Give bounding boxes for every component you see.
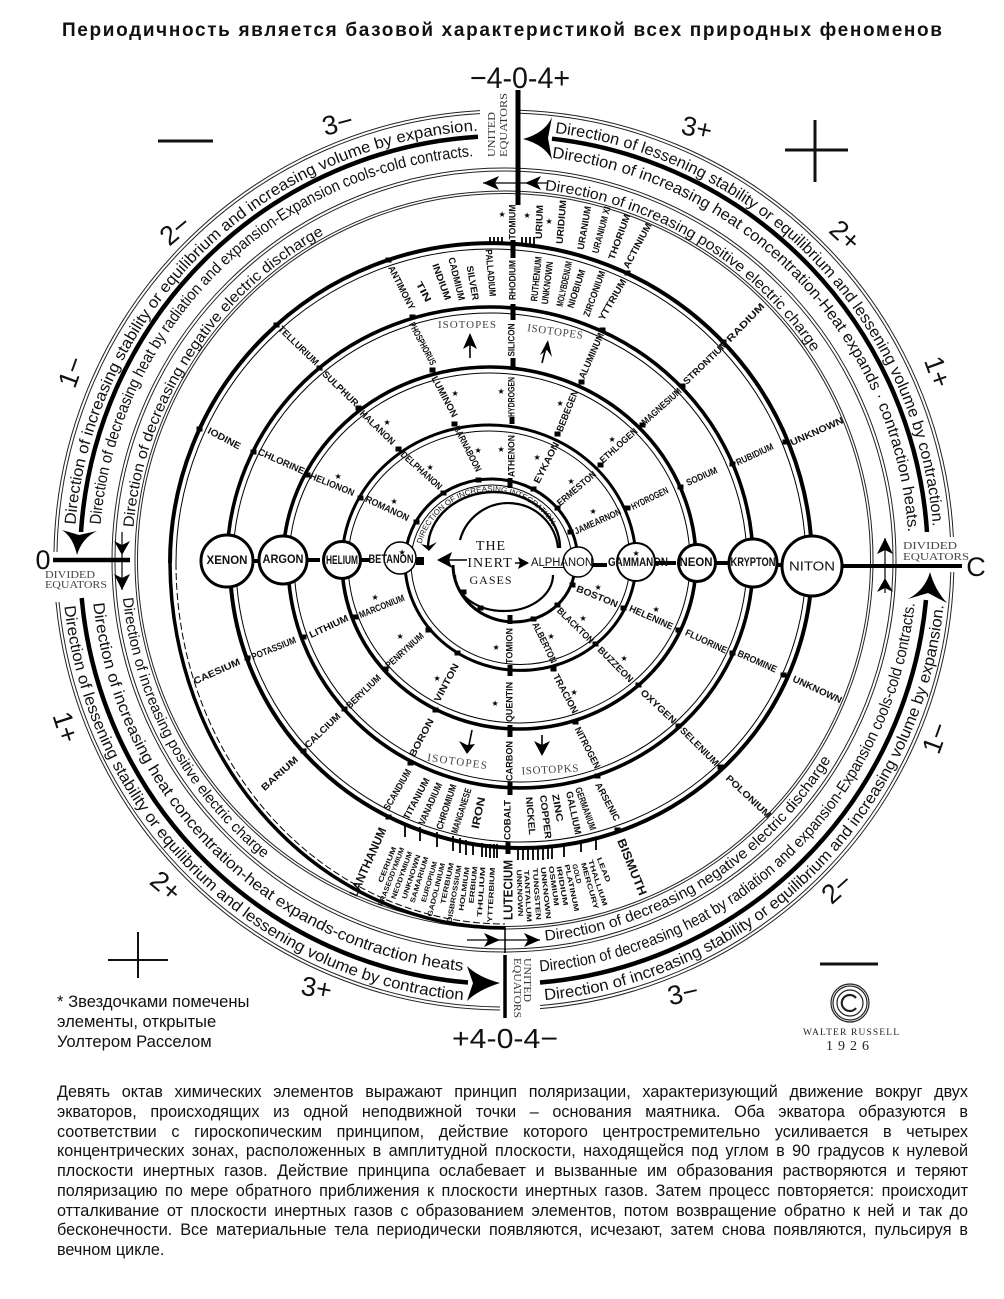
radial element labels: upper half: PALLADIUM <box>482 249 498 297</box>
footnote about stars <box>57 992 249 1051</box>
radial element labels: lower half: CAESIUM <box>192 657 242 687</box>
radial element labels: lower half: UNKNOWN <box>791 674 843 706</box>
radial element labels: upper half: SULPHUR <box>320 369 360 409</box>
united equators labels: EQUATORS <box>499 93 510 157</box>
equator element names: ARGON <box>262 554 304 566</box>
radial element labels: lower half: SELENIUM <box>677 725 721 769</box>
radial element labels: upper half: ETHLOGEN <box>598 426 640 466</box>
body paragraph: соответствии с гироскопическим принципом, действие которого центростремительно усиливается в четырех <box>57 1122 968 1140</box>
radial element labels: lower half: MARCONIUM <box>358 593 406 621</box>
radial element labels: lower half: ZINC <box>549 793 565 823</box>
zero right: C <box>966 552 986 582</box>
radial element labels: lower half: COBALT <box>502 800 514 840</box>
equator element names: XENON <box>206 555 248 567</box>
radial element labels: upper half: THORIUM <box>607 212 633 261</box>
body paragraph: Девять октав химических элементов выражают принцип поляризации, характеризующий движение вокруг двух <box>57 1083 968 1101</box>
radial element labels: lower half: VINTON <box>432 662 462 704</box>
copyright mark and signature: WALTER RUSSELL <box>803 1028 899 1038</box>
radial element labels: tiny rare earth row: OSMIUM <box>547 866 559 907</box>
lower half spiral rings <box>170 561 812 928</box>
central arrows <box>437 552 529 569</box>
radial element labels: upper half: EYKAON <box>532 440 562 486</box>
body paragraph: бесконечности. Все материальные тела периодически появляются, исчезают, затем снова появляются, пульсируя в <box>57 1221 968 1239</box>
united equators labels <box>487 93 532 1018</box>
hatch ticks below the lutecium ring <box>405 237 596 860</box>
middle band double rings <box>112 168 896 952</box>
radial element labels: lower half: VANADIUM <box>417 781 445 827</box>
isotopes labels and arrows: ISOTOPKS <box>521 763 579 777</box>
radial element labels: lower half: QUENTIN <box>504 682 516 722</box>
title: Периодичность является базовой характеристикой всех природных феноменов <box>62 20 942 41</box>
radial element labels: upper half: RADIUM <box>725 301 767 345</box>
curved direction text: Direction of lessening stability or equilibrium and lessening volume by contraction <box>64 606 463 1000</box>
radial element labels: lower half: COPPER <box>537 794 553 840</box>
radial element labels: lower half: BISMUTH <box>614 837 650 897</box>
radial element labels: upper half: RHODIUM <box>508 260 518 300</box>
radial element labels: tiny rare earth row: UNKNOWN <box>539 867 551 919</box>
radial element labels: upper half: BARNABOON <box>451 424 483 474</box>
footnote about stars: Уолтером Расселом <box>57 1032 212 1051</box>
radial element labels: tiny rare earth row: GADOLINIUM <box>427 862 447 918</box>
octave numbers: 1− <box>52 352 91 392</box>
radial element labels: lower half: FLUORINE <box>683 628 729 656</box>
curved direction text: Direction of increasing positive electric charge <box>123 598 268 857</box>
radial element labels: lower half: BARIUM <box>259 754 301 793</box>
radial element labels: lower half: MANGANESE <box>450 787 474 835</box>
radial element labels: tiny rare earth row: YTTERBIUM <box>487 867 497 923</box>
outer double ring <box>54 110 954 1010</box>
axis numbers top: −4-0-4+ <box>470 62 570 95</box>
equator element names: BETANON <box>368 554 414 566</box>
octave numbers: 3− <box>319 105 356 142</box>
footnote about stars: * Звездочками помечены <box>57 992 249 1011</box>
divided equators labels: EQUATORS <box>45 580 107 591</box>
radial element labels: tiny rare earth row: NEODYMIUM <box>391 851 414 900</box>
radial element labels: lower half <box>192 584 843 920</box>
radial element labels: lower half: LANTHANUM <box>347 825 389 899</box>
radial element labels: lower half: TRACION <box>550 672 580 716</box>
axis numbers bottom: +4-0-4− <box>452 1023 558 1054</box>
central label: the inert gases: THE <box>476 539 506 554</box>
radial element labels: upper half: ROMANON <box>363 494 411 524</box>
body paragraph <box>57 1083 968 1259</box>
curved direction text <box>64 121 944 1021</box>
curved direction text: Direction of increasing stability or equilibrium and increasing volume by expansion. <box>64 121 476 524</box>
radial element labels: upper half: ANTIMONY <box>385 264 417 312</box>
curved direction text: Direction of increasing heat concentration-heat expands-contraction heats <box>93 603 463 971</box>
radial element labels: upper half: ATHENON <box>506 435 518 477</box>
radial element labels: upper half: HELIONON <box>308 471 356 499</box>
radial element labels: lower half: TOMION <box>504 628 516 664</box>
radial element labels: lower half: BROMINE <box>736 648 778 676</box>
radial element labels: upper half: UNKNOWN <box>540 261 556 305</box>
radial element labels: lower half: BORON <box>407 717 437 759</box>
curved direction text: Direction of increasing positive electric charge <box>546 180 818 351</box>
octave numbers: 2− <box>154 209 197 251</box>
curved direction text: Direction of increasing heat concentration-Heat expands · contraction heats. <box>553 147 918 531</box>
radial element labels: lower half: LITHIUM <box>308 613 350 641</box>
octave numbers: 1− <box>916 718 955 758</box>
radial element labels: upper half: URIUM <box>534 205 546 239</box>
radial element labels: lower half: POLONIUM <box>723 773 773 821</box>
body paragraph: отталкивание от плоскости инертных газов с образованием элементов, потом возвращение обратно к ней и так до <box>57 1202 968 1220</box>
radial element labels: upper half: URIDIUM <box>555 200 569 244</box>
radial element labels: lower half: BUZZEON <box>595 645 635 685</box>
radial element labels: upper half: RUTHENIUM <box>529 256 545 302</box>
radial element labels: upper half: ACTINIUM <box>621 221 655 271</box>
radial element labels: upper half: UNKNOWN <box>789 415 845 449</box>
radial element labels: lower half: HELENINE <box>627 603 675 633</box>
radial element labels: lower half: CHROMIUM <box>435 783 460 831</box>
radial element labels: lower half: LUTECIUM <box>500 860 516 920</box>
curved direction text: Direction of decreasing heat by radiation and expansion-Expansion cools-cold contracts. <box>540 604 915 972</box>
radial element labels: upper half: DELPHANON <box>398 450 444 493</box>
divided equators labels: DIVIDED <box>45 570 95 581</box>
isotopes labels and arrows <box>426 319 584 777</box>
quadrant polarity signs <box>108 120 878 978</box>
divided equators labels <box>45 541 969 591</box>
equator element names: HELIUM <box>326 555 358 567</box>
footnote about stars: элементы, открытые <box>57 1012 216 1031</box>
upper half spiral rings <box>170 243 812 563</box>
body paragraph: экваторов, происходящих из одной неподвижной точки – основания маятника. Оба экватора образуются в <box>57 1103 968 1121</box>
radial element labels: upper half: HYDROGEN <box>506 377 518 417</box>
radial element labels: lower half: OXYGEN <box>638 688 678 726</box>
radial element labels: tiny rare earth row: CERIUM <box>378 846 398 884</box>
radial element labels: lower half: BOSTON <box>575 584 620 610</box>
radial element labels: tiny rare earth row: DISBROSSIUM <box>447 865 464 923</box>
equator element names: ALPHANON <box>531 557 593 569</box>
radial element labels: upper half: RUBIDIUM <box>735 442 776 468</box>
radial element labels: tiny rare earth row: SAMARIUM <box>410 856 430 904</box>
diagram: periodic spiral of elements <box>35 62 986 1054</box>
radial element labels: tiny rare earth row: TANTALUM <box>522 870 532 922</box>
radial element labels: tiny rare earth row: HOLMIUM <box>458 867 472 911</box>
octave numbers: 3+ <box>679 110 715 146</box>
copyright mark and signature <box>803 984 899 1054</box>
curved direction text: Direction of decreasing negative electric discharge <box>123 228 322 526</box>
united equators labels: UNITED <box>487 112 498 157</box>
radial element labels: lower half: NICKEL <box>523 797 537 836</box>
octave numbers: 3+ <box>299 971 334 1006</box>
radial element labels: lower half: ARSENIC <box>592 781 622 823</box>
radial element labels: lower half: BERYLIUM <box>344 673 384 711</box>
radial element labels: tiny rare earth row: GOLD <box>570 863 582 885</box>
isotopes labels and arrows: ISOTOPES <box>426 752 488 772</box>
radial element labels: upper half: MOLYBDENUM <box>555 260 575 308</box>
divided equators labels: EQUATORS <box>903 552 969 563</box>
equator element names: NITON <box>789 558 835 574</box>
equator element names <box>206 554 835 574</box>
radial element labels: upper half: CHLORINE <box>256 447 306 477</box>
divided equators labels: DIVIDED <box>903 541 957 552</box>
copyright mark and signature: 1926 <box>826 1039 869 1054</box>
octave numbers: 3− <box>665 975 701 1011</box>
radial element labels: lower half: PENRYNIUM <box>383 631 427 671</box>
radial element labels: tiny rare earth row: UNKNOWN <box>515 869 523 917</box>
radial element labels: tiny rare earth row: THULIUM <box>477 867 487 917</box>
small band arrows <box>114 176 893 947</box>
integration label: DIRECTION OF INCREASING INTEGRATION. <box>416 486 556 544</box>
octave numbers: 2+ <box>144 865 187 907</box>
radial element labels: lower half: GALLIUM <box>563 790 583 836</box>
zero left: 0 <box>35 545 51 575</box>
radial element labels: lower half: ALBERTON <box>529 621 559 665</box>
radial element labels: lower half: CARBON <box>504 741 516 781</box>
inner integration arcs <box>421 492 560 611</box>
radial element labels: upper half: SILVER <box>464 265 480 301</box>
equator element names: KRYPTON <box>730 557 776 569</box>
radial element labels: tiny rare earth row: ERBIUM <box>469 866 479 904</box>
octave numbers: 1+ <box>918 352 957 392</box>
radial element labels: upper half: ZIRCONIUM <box>582 269 608 318</box>
curved direction text: Direction of lessening stability or equilibrium and lessening volume by contraction. <box>556 122 942 526</box>
element circles <box>201 535 842 596</box>
radial element labels: upper half: URANIUM XI <box>590 205 614 255</box>
radial element labels: tiny rare earth row: TUNGSTEN <box>531 868 541 920</box>
radial element labels: upper half: URANIUM <box>576 205 594 251</box>
radial element labels: tiny rare earth row: PLATINUM <box>563 864 579 912</box>
radial element labels: upper half: MAGNESIUM <box>640 386 684 428</box>
radial element labels: upper half: BEBEGEN <box>555 388 581 433</box>
radial element labels: tiny rare earth row <box>378 846 611 923</box>
radial element labels: tiny rare earth row: LEAD <box>595 857 611 883</box>
octave numbers: 1+ <box>47 708 85 746</box>
radial element labels: upper half: STRONTIUM <box>681 339 731 387</box>
radial element labels: upper half: YTTRIUM <box>597 277 629 323</box>
radial element labels: lower half: GERMANIUM <box>572 786 598 832</box>
body paragraph: плоскости инертных газов. Действие принципа ослабевает и вызванные им образования растворяются и теряют <box>57 1162 968 1180</box>
radial element labels: upper half: HYDROGEN <box>630 485 670 513</box>
equator element names: NEON <box>680 557 712 569</box>
radial element labels: upper half: INDIUM <box>429 262 453 302</box>
radial element labels: upper half: JAMEARNON <box>573 507 623 537</box>
central label: the inert gases <box>467 539 513 587</box>
square at betanon <box>416 557 424 565</box>
radial element labels: tiny rare earth row: PRASEODYMIUM <box>378 847 406 907</box>
black nodes on the rings <box>199 260 786 830</box>
curved direction text: Direction of decreasing negative electric discharge <box>545 757 830 941</box>
radial element labels: upper half: TIN <box>413 280 433 304</box>
octave numbers: 2+ <box>824 214 867 257</box>
radial element labels: upper half: TELLURIUM <box>275 324 321 368</box>
radial element labels: tiny rare earth row: MERCURY <box>579 862 599 910</box>
radial element labels: tiny rare earth row: EUROPIUM <box>421 861 439 903</box>
radial element labels: upper half: ALUMINUM <box>577 331 607 381</box>
radial element labels: tiny rare earth row: THALLIUM <box>586 859 608 907</box>
thick direction arcs with arrowheads <box>62 117 947 1001</box>
radial element labels: lower half: CALCIUM <box>303 711 343 751</box>
radial element labels: upper half: HALANON <box>357 408 397 448</box>
radial element labels: lower half: NITROGEN <box>572 725 602 771</box>
octave numbers <box>47 105 957 1011</box>
body paragraph: вечном цикле. <box>57 1241 164 1259</box>
radial element labels: upper half: TOMIUM <box>508 204 518 240</box>
curved direction text: Direction of increasing stability or equilibrium and increasing volume by expansion. <box>544 606 944 1000</box>
radial element labels: lower half: SCANDIUM <box>382 767 414 813</box>
radial element labels: upper half: LUMINON <box>429 375 459 420</box>
radial element labels: lower half: BLACKTON <box>554 606 596 646</box>
body paragraph: концентрических зонах, расположенных в амплитудной плоскости, находящейся под углом в 90 градусов к нулевой <box>57 1142 968 1160</box>
united equators labels: EQUATORS <box>511 958 522 1018</box>
body paragraph: поляризацию по мере обратного приближения к плоскости инертных газов. Затем процесс повторяется: происходит <box>57 1182 968 1200</box>
isotopes labels and arrows: ISOTOPES <box>438 319 496 331</box>
radial element labels: upper half: SODIUM <box>685 465 719 489</box>
radial element labels: tiny rare earth row: TERBIUM <box>440 862 456 905</box>
octave numbers: 2− <box>815 867 858 910</box>
central label: the inert gases: INERT <box>467 556 513 571</box>
radial element labels: lower half: TITANIUM <box>401 776 433 822</box>
radial element labels: upper half: ERMESTON <box>555 469 599 509</box>
radial element labels: upper half: CADMIUM <box>445 256 467 302</box>
radial element labels: upper half: IODINE <box>206 426 242 452</box>
equator axes <box>53 90 962 1018</box>
radial element labels: tiny rare earth row: IRIDIUM <box>555 866 568 907</box>
central label: the inert gases: GASES <box>469 573 513 587</box>
equator element names: GAMMANON <box>608 557 668 569</box>
stars marking Russell's elements: ★★★★★★★★★★★★★★★★★★★★★★★★★★★★★ <box>334 210 660 708</box>
radial element labels: upper half <box>206 200 845 537</box>
radial element labels: lower half: POTASSIUM <box>250 635 298 663</box>
radial element labels: tiny rare earth row: UNKNOWN <box>402 854 422 900</box>
curved direction text: Direction of decreasing heat by radiation and expansion-Expansion cools-cold contracts. <box>90 147 472 524</box>
radial element labels: upper half: SILICON <box>506 323 518 356</box>
radial element labels: upper half: PHOSPHORUS <box>406 321 438 367</box>
united equators labels: UNITED <box>521 958 532 1002</box>
radial element labels: lower half: IRON <box>470 796 488 830</box>
radial element labels: upper half: NIOBIUM <box>566 268 588 310</box>
isotopes labels and arrows: ISOTOPES <box>526 322 584 342</box>
